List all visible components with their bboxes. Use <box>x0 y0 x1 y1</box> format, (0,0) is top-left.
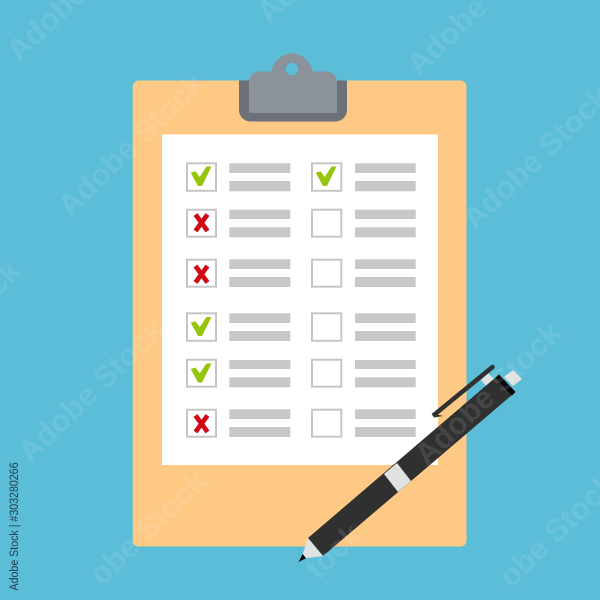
row 1 left: checked <box>187 163 290 191</box>
side credit text: Adobe Stock | #303280266 <box>9 462 21 590</box>
row 3 right: empty <box>312 259 416 287</box>
row 1 right: checked <box>312 163 416 191</box>
pen cap end <box>496 374 516 396</box>
icon: pen <box>298 367 521 562</box>
row 5 right: empty <box>312 360 416 387</box>
row 3 left: crossed <box>187 259 290 287</box>
row 4 left: checked <box>187 313 290 341</box>
row 6 left: crossed <box>187 409 290 437</box>
row 2 right: empty <box>312 210 416 237</box>
watermark: Adobe Stock repeated: Adobe Stock <box>11 312 172 469</box>
watermark: Adobe Stock repeated: tock <box>299 516 369 586</box>
checklist right column <box>312 163 416 437</box>
icon: clipboard clip <box>239 54 347 122</box>
row 2 left: crossed <box>187 210 290 237</box>
row 6 right: empty <box>312 409 416 437</box>
pen button <box>505 371 521 385</box>
row 5 left: checked <box>187 360 290 387</box>
watermark: Adobe Stock repeated: Adobe Stock <box>408 315 569 472</box>
watermark: Adobe Stock repeated: obe Stock <box>83 463 214 592</box>
watermark: Adobe Stock repeated: Adobe Stock <box>51 66 212 223</box>
panel: paper sheet <box>162 134 438 465</box>
row 4 right: empty <box>312 313 416 341</box>
checklist left column <box>187 163 290 437</box>
pen tip <box>298 554 306 562</box>
pen band <box>384 463 411 492</box>
panel: clipboard board <box>133 80 466 546</box>
pen cone <box>303 538 323 558</box>
pen barrel <box>308 374 516 556</box>
pen clip <box>432 367 494 418</box>
